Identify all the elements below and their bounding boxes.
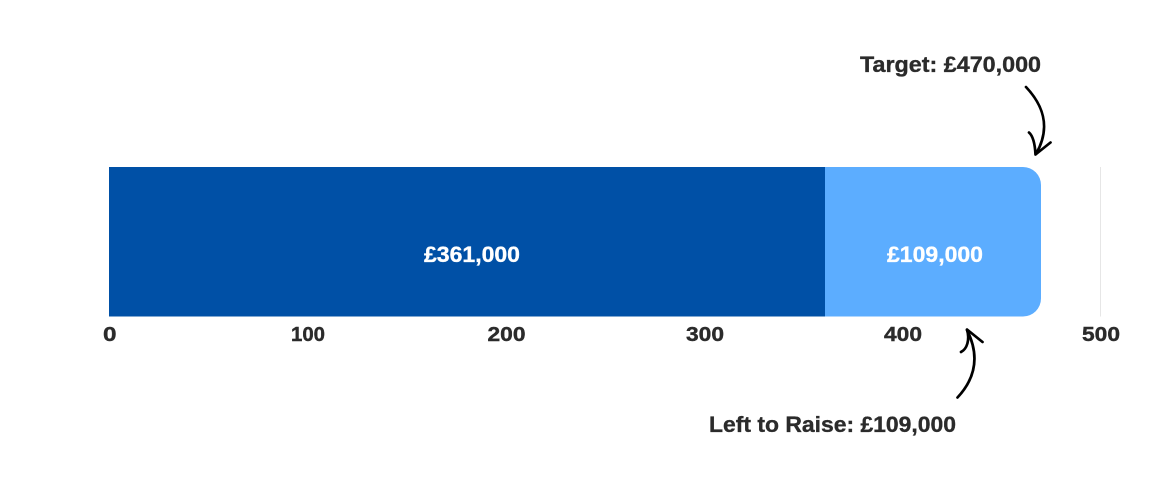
axis label 400: 400	[884, 323, 922, 346]
arrow: target	[1026, 87, 1050, 154]
callout: target: Target: £470,000	[860, 52, 1041, 77]
axis label 500: 500	[1082, 323, 1120, 346]
stacked bar	[109, 167, 1041, 316]
axis label 200: 200	[488, 323, 526, 346]
axis label 100: 100	[291, 323, 325, 346]
value label: left to raise: £109,000	[887, 242, 983, 267]
value label: raised: £361,000	[424, 242, 520, 267]
axis label 0: 0	[103, 323, 116, 346]
axis label 300: 300	[686, 323, 724, 346]
bar segment: raised	[109, 167, 825, 316]
arrow: left to raise	[958, 330, 982, 398]
callout: left to raise: Left to Raise: £109,000	[709, 412, 956, 437]
x axis labels	[103, 323, 1120, 346]
bar segment: left to raise	[825, 167, 1041, 316]
